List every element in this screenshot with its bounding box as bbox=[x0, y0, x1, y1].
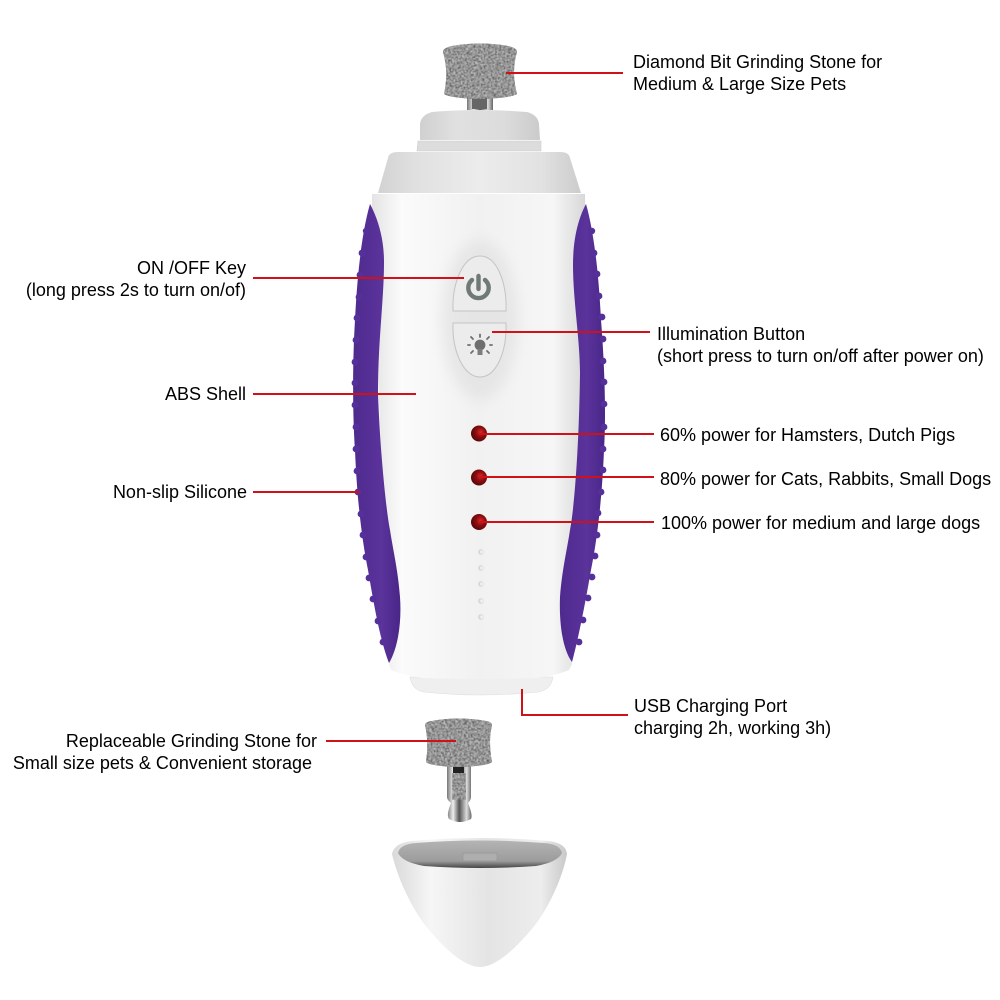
shading around buttons bbox=[442, 240, 518, 400]
top diamond grinding stone bbox=[443, 44, 517, 110]
callout: diamond bit: Diamond Bit Grinding Stone for bbox=[633, 52, 882, 72]
LED indicators bbox=[471, 426, 487, 530]
callout: replaceable grinding stone: Replaceable Grinding Stone for bbox=[66, 731, 317, 751]
power button bbox=[453, 256, 506, 311]
callout: replaceable grinding stone bbox=[13, 731, 456, 773]
left silicone grip bbox=[352, 204, 400, 663]
callout: non-slip silicone: Non-slip Silicone bbox=[113, 482, 247, 502]
callout: illumination button: Illumination Button bbox=[657, 324, 805, 344]
replacement grinding stone bbox=[425, 718, 492, 822]
icon: light bulb bbox=[468, 334, 492, 355]
callout: USB charging port: USB Charging Port bbox=[634, 696, 787, 716]
small embossed dots bbox=[478, 549, 484, 620]
cap of grinder bbox=[378, 152, 581, 193]
callout: diamond bit bbox=[506, 52, 882, 94]
callout: ABS shell: ABS Shell bbox=[165, 384, 246, 404]
USB base of grinder bbox=[410, 677, 553, 695]
callout: 80% power: 80% power for Cats, Rabbits, Small Dogs bbox=[660, 469, 991, 489]
callout: on/off key: (long press 2s to turn on/of) bbox=[26, 280, 246, 300]
callout: USB charging port bbox=[522, 689, 831, 738]
callout: illumination button: (short press to turn on/off after power on) bbox=[657, 346, 984, 366]
illumination button bbox=[453, 323, 506, 377]
callout: diamond bit: Medium & Large Size Pets bbox=[633, 74, 846, 94]
callout: on/off key: ON /OFF Key bbox=[137, 258, 246, 278]
white ABS body bbox=[372, 194, 585, 679]
storage cup bbox=[392, 838, 567, 967]
callout: illumination button bbox=[492, 324, 984, 366]
callout: 100% power: 100% power for medium and large dogs bbox=[661, 513, 980, 533]
callout: replaceable grinding stone: Small size pets & Convenient storage bbox=[13, 753, 312, 773]
callout: 60% power: 60% power for Hamsters, Dutch Pigs bbox=[660, 425, 955, 445]
icon: power symbol bbox=[468, 276, 489, 298]
right silicone grip bbox=[560, 204, 607, 662]
collar of grinder head bbox=[417, 110, 541, 151]
callout: on/off key bbox=[26, 258, 464, 300]
callout: USB charging port: charging 2h, working 3h) bbox=[634, 718, 831, 738]
